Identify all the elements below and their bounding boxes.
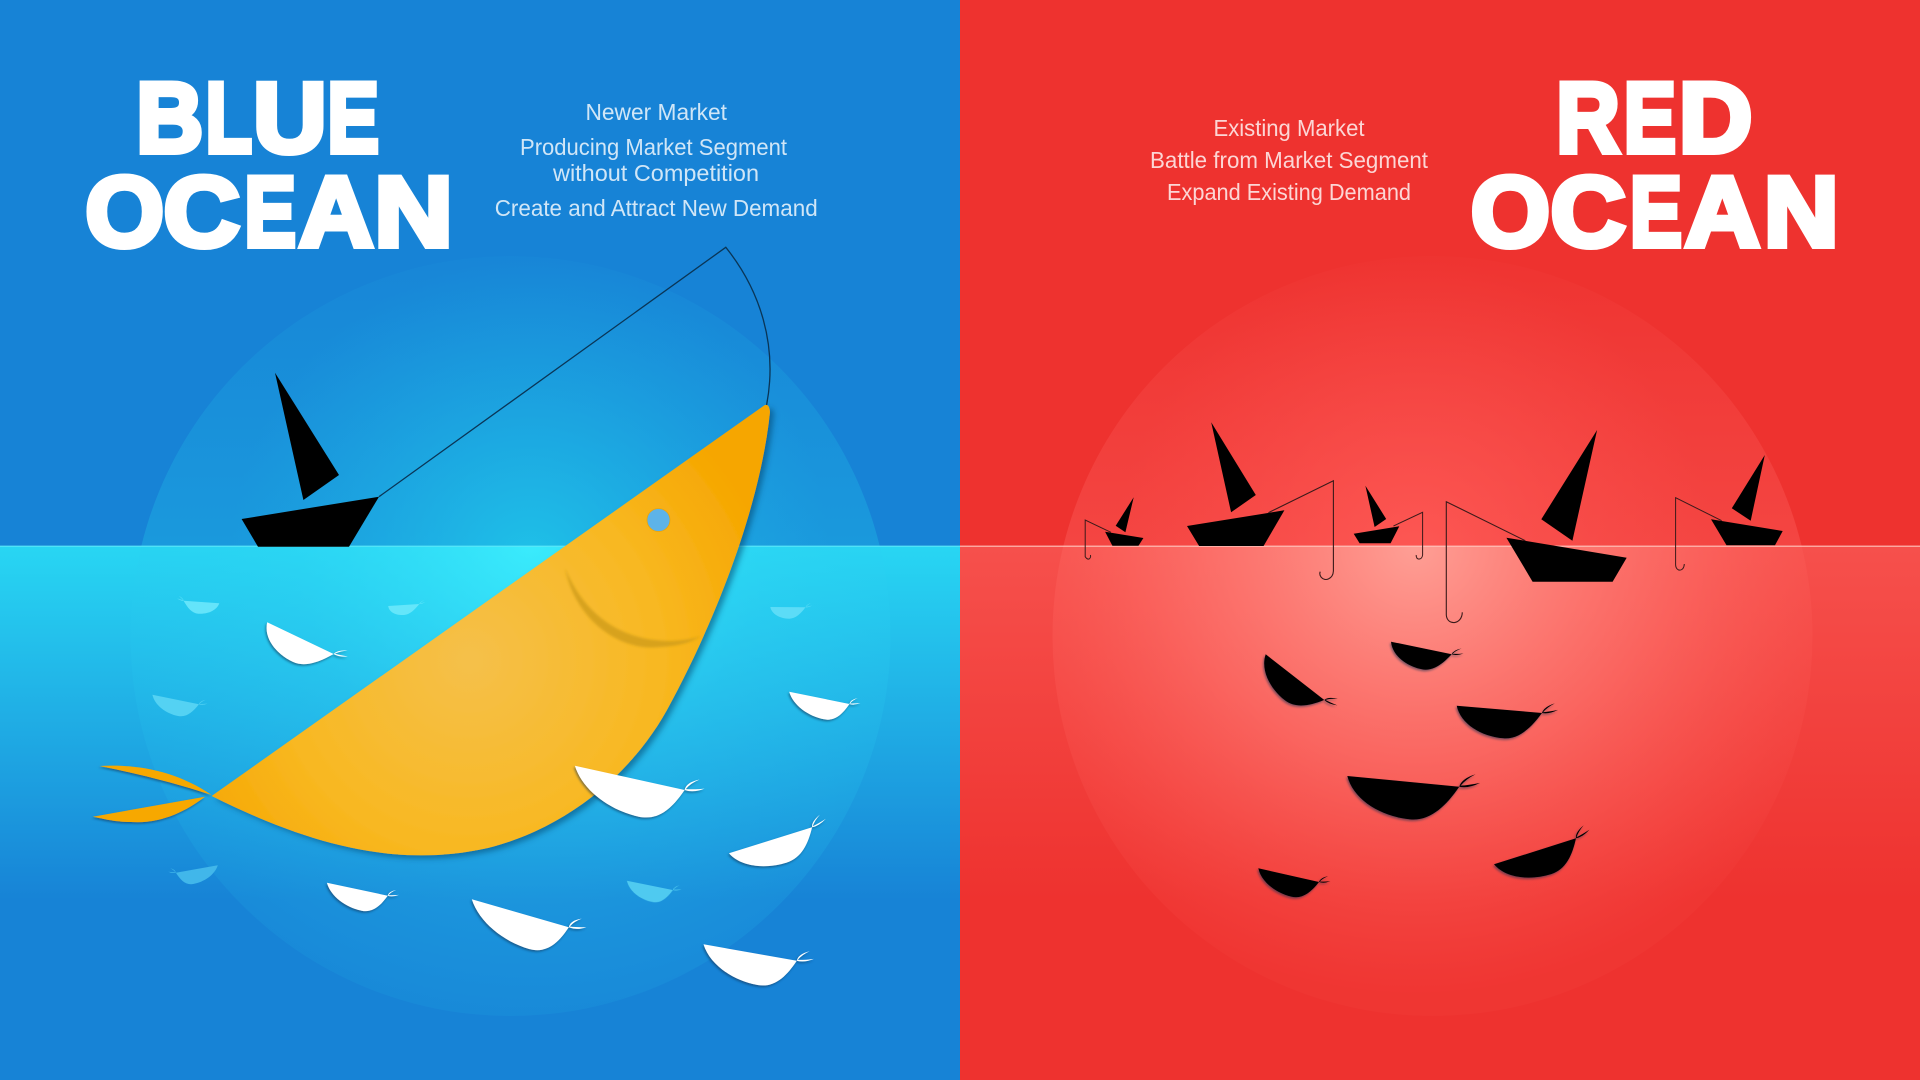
fish smile [565,568,701,648]
heading: blue ocean: B [136,62,203,173]
big yellow fish [93,405,770,855]
blue sun circle below the water [202,547,858,1004]
text block: red ocean traits: Existing Market [1214,115,1365,141]
heading: blue ocean: N [374,156,453,267]
heading: red ocean [1471,62,1839,267]
black fish school [1250,634,1599,905]
heading: blue ocean: U [253,62,327,173]
text block: red ocean traits [1150,115,1428,205]
text block: blue ocean traits: Create and Attract New Demand [495,195,818,221]
fish tail [93,766,212,822]
white fish school [253,615,861,995]
blue sun circle above the water [142,284,880,546]
small boat 1 with rod [1085,497,1143,559]
text block: blue ocean traits: Producing Market Segment [520,134,787,160]
boat 5 with rod [1676,455,1783,570]
text block: red ocean traits: Battle from Market Segment [1150,147,1428,173]
heading: red ocean: O [1471,156,1550,267]
large boat 4 with rod [1446,430,1627,623]
panel: red ocean [960,0,1920,1080]
heading: blue ocean [85,62,453,267]
red sun circle below the water [1052,546,1780,960]
faint fish school [150,596,813,907]
heading: blue ocean: E [327,62,379,173]
heading: red ocean: R [1556,62,1620,173]
heading: red ocean: A [1685,156,1760,267]
fishing rod line [379,247,770,497]
panel: blue ocean [0,80,960,1004]
fish eye [647,508,670,532]
text block: red ocean traits: Expand Existing Demand [1167,179,1411,205]
heading: red ocean: N [1764,156,1839,267]
heading: blue ocean: L [206,62,252,173]
heading: blue ocean: A [299,156,373,267]
heading: blue ocean: O [85,156,164,267]
fish body [212,405,770,855]
heading: red ocean: E [1630,156,1682,267]
text block: blue ocean traits [495,99,818,221]
text block: blue ocean traits: Newer Market [586,99,727,125]
big boat [242,373,379,547]
heading: red ocean: D [1679,62,1752,173]
large boat 2 with rod [1187,422,1333,579]
heading: blue ocean: C [164,156,240,267]
heading: red ocean: E [1624,62,1676,173]
small boat 3 with rod [1354,486,1423,559]
heading: blue ocean: E [244,156,296,267]
text block: blue ocean traits: without Competition [552,160,759,186]
heading: red ocean: C [1551,156,1626,267]
red sun circle above the water [1064,298,1802,546]
